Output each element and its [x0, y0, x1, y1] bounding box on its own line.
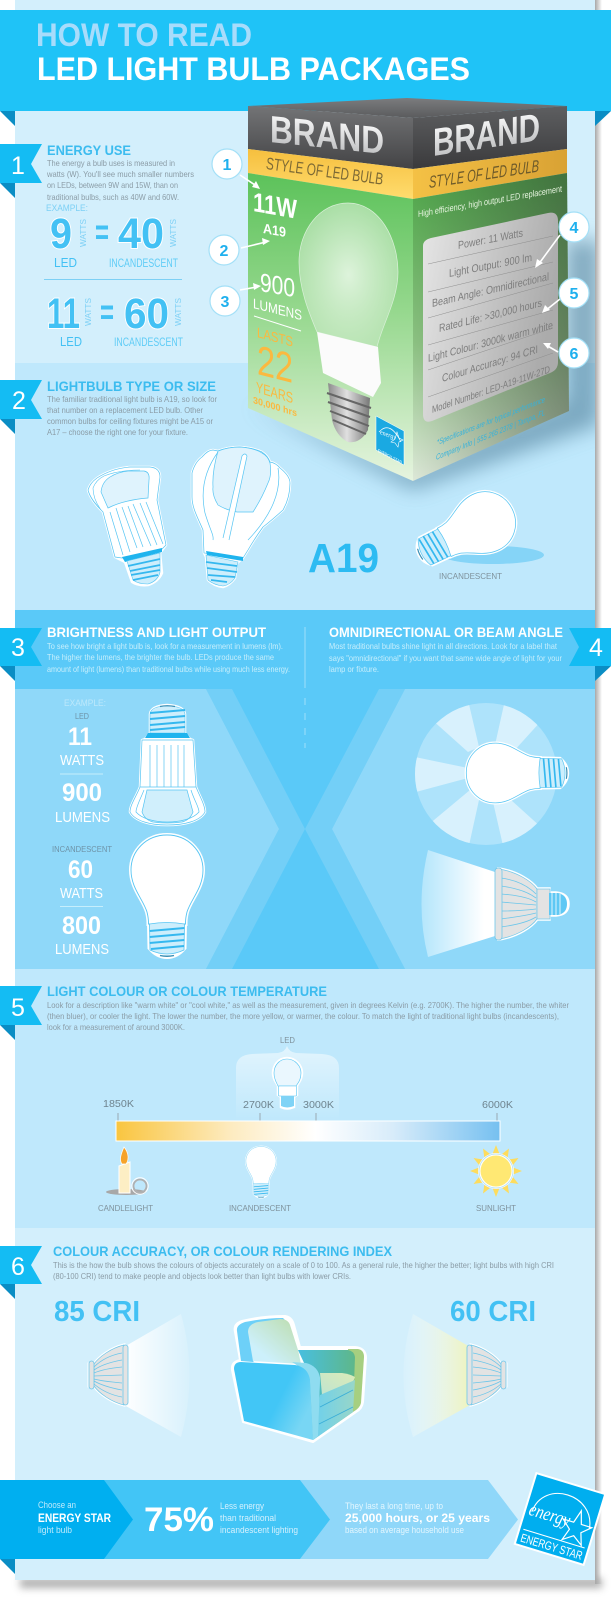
ribbon 4 [569, 628, 611, 681]
body text [53, 1260, 554, 1281]
equation: 9 watts equals 40 watts: INCANDESCENT [109, 256, 178, 270]
body text: that number on a replacement LED bulb. Other [47, 405, 203, 415]
spec label panel: Beam Angle: Omnidirectional [432, 271, 549, 310]
panel: brightness and light output [0, 624, 290, 958]
kelvin labels and ticks [103, 1098, 513, 1121]
icon: LED bulb with fins [192, 447, 290, 587]
title: LED LIGHT BULB PACKAGES [37, 51, 470, 87]
front panel claims: 900 [260, 267, 295, 303]
icon: candle [106, 1147, 148, 1195]
callout 6 [559, 338, 589, 368]
front panel claims: 11W [253, 186, 297, 225]
incandescent example figures: 800 [62, 912, 101, 940]
body text: common bulbs for ceiling fixtures might be A15 or [47, 416, 213, 426]
step 2 text: than traditional [220, 1513, 276, 1523]
incandescent example figures: LUMENS [55, 941, 109, 958]
step 2 text: Less energy [220, 1501, 264, 1511]
icon: energy star logo: energy [526, 1499, 573, 1532]
icon: tipped incandescent bulb [406, 482, 544, 582]
ribbon 5 [0, 986, 42, 1040]
85 CRI label: 85 CRI [54, 1296, 140, 1328]
LED example figures: WATTS [60, 752, 104, 769]
heading: OMNIDIRECTIONAL OR BEAM ANGLE [329, 624, 563, 640]
LED example figures: 11 [68, 723, 92, 751]
chevron backgrounds of brightness and beam panels [15, 689, 595, 969]
incandescent example figures: INCANDESCENT [52, 845, 112, 854]
panel: colour accuracy [0, 1243, 554, 1442]
equation: 11 watts equals 60 watts: WATTS [83, 298, 93, 326]
body text [329, 641, 562, 674]
small energy star logo: ENERGY STAR [378, 448, 402, 466]
step 1 text: light bulb [38, 1525, 72, 1535]
captions: INCANDESCENT [229, 1203, 291, 1213]
kelvin labels and ticks: 1850K [103, 1098, 134, 1110]
divider [304, 627, 306, 748]
callout 6: 6 [570, 346, 579, 363]
brand text: BRAND [433, 106, 540, 165]
callout 2: 2 [220, 243, 229, 260]
step 1 text: ENERGY STAR [38, 1513, 112, 1525]
ribbon 6: 6 [11, 1253, 25, 1281]
spec label panel: Light Colour: 3000k warm white [428, 320, 553, 365]
ribbon 4: 4 [589, 634, 603, 662]
spec label panel: Power: 11 Watts [458, 227, 523, 252]
callout 1 [212, 149, 242, 179]
ribbon 5: 5 [11, 994, 25, 1022]
front panel claims: A19 [263, 220, 286, 240]
body text [46, 158, 194, 202]
panel: energy use [0, 142, 194, 349]
LED example figures: EXAMPLE: [64, 698, 106, 708]
body text: lamp or fixture. [329, 664, 379, 674]
icon: armchair [232, 1316, 366, 1442]
step 3 text: based on average household use [345, 1525, 464, 1535]
LED example figures: 900 [62, 779, 102, 807]
body text: amount of light (lumens) than traditional bulbs while using much less energy. [47, 664, 290, 674]
incandescent example figures: 60 [68, 856, 93, 884]
step 3 text: They last a long time, up to [345, 1501, 443, 1511]
style of bulb text: STYLE OF LED BULB [429, 157, 539, 192]
body text: The familiar traditional light bulb is A19, so look for [47, 394, 217, 404]
body text: A17 – choose the right one for your fixture. [47, 427, 188, 437]
fine print [436, 394, 545, 462]
LED example figures: LED [75, 712, 89, 721]
equation: 11 watts equals 60 watts: INCANDESCENT [114, 335, 183, 349]
60 CRI label: 60 CRI [450, 1296, 536, 1328]
package bulb [299, 203, 398, 442]
body text: says "omnidirectional" if you want that same wide angle of light for your [329, 653, 562, 663]
equation: 9 watts equals 40 watts: 9 [50, 210, 72, 258]
brand text [270, 106, 540, 165]
kelvin labels and ticks: 2700K [243, 1099, 274, 1111]
body text: This is the how the bulb shows the colours of objects accurately on a scale of 0 to 100. As a general rule, the higher the better; light bulbs with high CRI [53, 1260, 554, 1270]
captions [98, 1203, 516, 1213]
colour temperature bar [116, 1121, 500, 1141]
panel: lightbulb type or size [0, 378, 544, 587]
example label: EXAMPLE: [46, 203, 88, 213]
LED range glow [236, 1035, 339, 1121]
fine print: *Specifications are for typical performance [437, 394, 545, 447]
equation: 11 watts equals 60 watts: LED [60, 334, 82, 349]
light beam: 85 CRI [89, 1314, 190, 1437]
front panel claims: LUMENS [253, 296, 302, 324]
ribbon 2: 2 [12, 387, 26, 415]
body text [47, 394, 217, 437]
spec label panel: Colour Accuracy: 94 CRI [442, 344, 538, 385]
body text: on LEDs, between 9W and 15W, than on [47, 180, 178, 190]
icon: small LED bulb [273, 1058, 302, 1108]
panel: bottom energy star banner [0, 1473, 605, 1574]
callout 1: 1 [223, 157, 232, 174]
heading: COLOUR ACCURACY, OR COLOUR RENDERING INDEX [53, 1243, 393, 1259]
front panel claims: YEARS [256, 379, 293, 407]
body text [47, 1000, 569, 1032]
step 3 text [345, 1501, 490, 1535]
heading: ENERGY USE [47, 142, 131, 158]
kelvin labels and ticks: 6000K [482, 1099, 513, 1111]
callout 2 [209, 235, 239, 265]
equation: 9 watts equals 40 watts: = [95, 211, 109, 252]
title banner [0, 10, 611, 126]
ribbon 1: 1 [11, 152, 25, 180]
heading: LIGHTBULB TYPE OR SIZE [47, 378, 216, 394]
numbered callouts and arrows [209, 149, 589, 368]
front panel claims [253, 186, 302, 419]
front panel claims: LASTS [257, 325, 293, 351]
LED example figures [55, 698, 110, 826]
body text: The energy a bulb uses is measured in [47, 158, 175, 168]
panel: light colour or colour temperature [0, 983, 569, 1213]
equation: 11 watts equals 60 watts: 11 [47, 290, 80, 338]
small energy star logo [376, 416, 404, 466]
callout 5 [559, 278, 589, 308]
front panel claims: 22 [257, 337, 293, 393]
product package box [248, 98, 569, 481]
body text: traditional bulbs, such as 40W and 60W. [47, 192, 179, 202]
equation: 9 watts equals 40 watts: WATTS [78, 219, 88, 247]
step 1 text [38, 1500, 112, 1535]
body text: To see how bright a light bulb is, look for a measurement in lumens (lm). [47, 641, 283, 651]
heading: BRIGHTNESS AND LIGHT OUTPUT [47, 624, 266, 640]
body text: (80-100 CRI) tend to make people and objects look better than light bulbs with lower CRIs. [53, 1271, 351, 1281]
incandescent example figures: WATTS [60, 885, 103, 902]
LED example figures: LUMENS [55, 809, 110, 826]
incandescent caption: INCANDESCENT [439, 571, 502, 581]
spec label panel: Rated Life: >30,000 hours [439, 297, 542, 335]
body text: Most traditional bulbs shine light in all directions. Look for a label that [329, 641, 558, 651]
step 2 text: incandescent lighting [220, 1525, 298, 1535]
icon: energy star logo [515, 1473, 605, 1565]
equation: 11 watts equals 60 watts [47, 290, 183, 349]
heading: LIGHT COLOUR OR COLOUR TEMPERATURE [47, 983, 327, 999]
title: HOW TO READ [36, 17, 252, 53]
equation: 11 watts equals 60 watts: WATTS [173, 298, 183, 326]
equation: 9 watts equals 40 watts: LED [54, 255, 77, 270]
body text [47, 641, 290, 674]
kelvin labels and ticks: 3000K [303, 1099, 334, 1111]
callout 4: 4 [570, 220, 579, 237]
body text: look for a measurement of around 3000K. [47, 1022, 185, 1032]
fine print: Company Info | 555 265 2378 | Tampa, FL [436, 407, 545, 462]
callout 3: 3 [221, 294, 230, 311]
callout 4 [559, 212, 589, 242]
ribbon 1 [0, 144, 42, 198]
brand text: BRAND [270, 109, 384, 163]
ribbon 2 [0, 380, 42, 434]
equation: 9 watts equals 40 watts: 40 [118, 210, 164, 258]
icon: incandescent bulb [131, 835, 203, 957]
LED range glow: LED [280, 1035, 295, 1045]
body text: (then bluer), or cooler the light. The lower the number, the more yellow, or warmer, the colour. To match the light of traditional light bulbs (incandescents), [47, 1011, 559, 1021]
spec label panel: Model Number: LED-A19-11W-27D [432, 365, 550, 416]
callout 3 [210, 286, 240, 316]
callout 5: 5 [570, 286, 579, 303]
step 2 text: 75% [144, 1501, 214, 1539]
spec label panel: Light Output: 900 lm [449, 252, 532, 280]
tagline: High efficiency, high output LED replacement [418, 184, 562, 219]
icon: small incandescent bulb [246, 1146, 276, 1198]
ribbon 3: 3 [11, 634, 25, 662]
body text: The higher the lumens, the brighter the bulb. LEDs produce the same [47, 652, 274, 662]
step 3 text: 25,000 hours, or 25 years [345, 1513, 490, 1525]
small energy star logo: energy [380, 428, 397, 442]
omnidirectional light burst [415, 703, 570, 845]
captions: SUNLIGHT [476, 1203, 516, 1213]
ribbon 6 [0, 1246, 42, 1299]
step 2 text [144, 1501, 298, 1539]
captions: CANDLELIGHT [98, 1203, 153, 1213]
step 1 text: Choose an [38, 1500, 76, 1510]
title [36, 17, 470, 87]
style of bulb text: STYLE OF LED BULB [266, 154, 383, 189]
icon: energy star logo: ENERGY STAR [519, 1531, 584, 1563]
equation: 9 watts equals 40 watts [50, 210, 178, 270]
box shadow [248, 240, 600, 490]
ribbon 3 [0, 628, 42, 681]
panel: omnidirectional or beam angle [305, 624, 611, 957]
equation: 11 watts equals 60 watts: 60 [124, 290, 169, 338]
icon: LED bulb with ribs [88, 467, 166, 585]
icon: inverted LED bulb [130, 705, 205, 825]
A19 label: A19 [308, 535, 379, 581]
equation: 11 watts equals 60 watts: = [100, 291, 114, 332]
style of bulb text [266, 154, 539, 192]
spec label panel [423, 213, 558, 422]
incandescent example figures [52, 845, 112, 958]
light beam: 60 CRI [404, 1314, 506, 1437]
body text: watts (W). You'll see much smaller numbers [46, 169, 194, 179]
directional beam and bulb [422, 850, 568, 957]
equation: 9 watts equals 40 watts: WATTS [168, 219, 178, 247]
front panel claims: 30,000 hrs [253, 395, 297, 419]
icon: sun [470, 1145, 522, 1197]
